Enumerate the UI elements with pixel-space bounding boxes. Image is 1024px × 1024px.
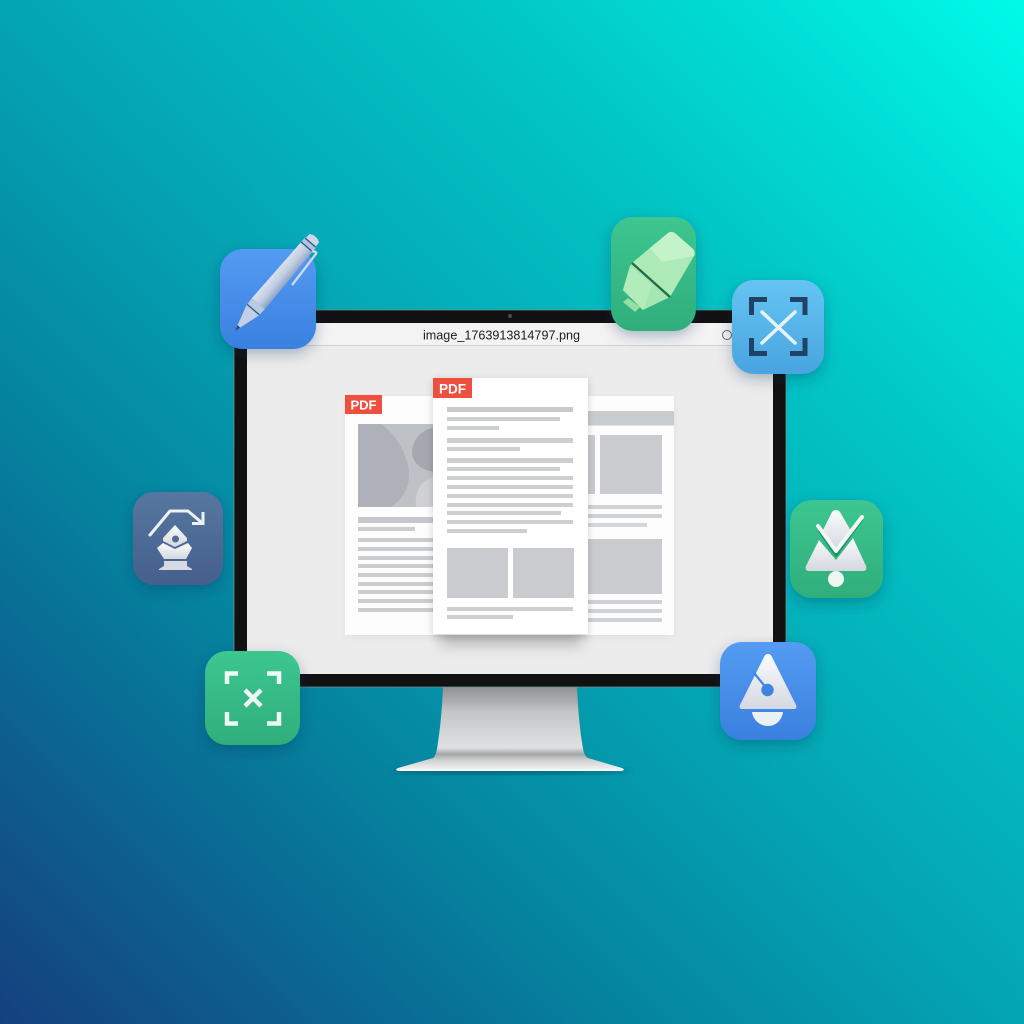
page shadows: [345, 396, 674, 646]
right page: [500, 396, 674, 635]
monitor stand: [390, 687, 630, 774]
icon: pen: [220, 231, 326, 349]
monitor bezel: [234, 310, 786, 687]
PDF badge front: [433, 378, 472, 398]
PDF badge front: PDF: [439, 382, 466, 396]
icon: expand cross blue: [732, 280, 824, 374]
PDF badge left: PDF: [350, 398, 377, 412]
window title bar: [247, 323, 773, 346]
front page: [433, 378, 588, 634]
icon: pen tool with arrow: [133, 492, 223, 585]
icon: highlighter: [611, 217, 696, 331]
document stack: [345, 378, 674, 646]
icon: scan frame green: [205, 651, 300, 745]
screen: [247, 346, 773, 674]
left page image: [358, 424, 438, 507]
monitor: [234, 310, 786, 774]
left page: [345, 395, 500, 635]
file name: image_1763913814797.png: [423, 328, 580, 342]
search icon: [722, 330, 732, 340]
icon: bell with dot: [720, 642, 816, 740]
icon: bell with check: [790, 500, 883, 598]
PDF badge left: [345, 395, 382, 414]
webcam: [508, 314, 512, 318]
